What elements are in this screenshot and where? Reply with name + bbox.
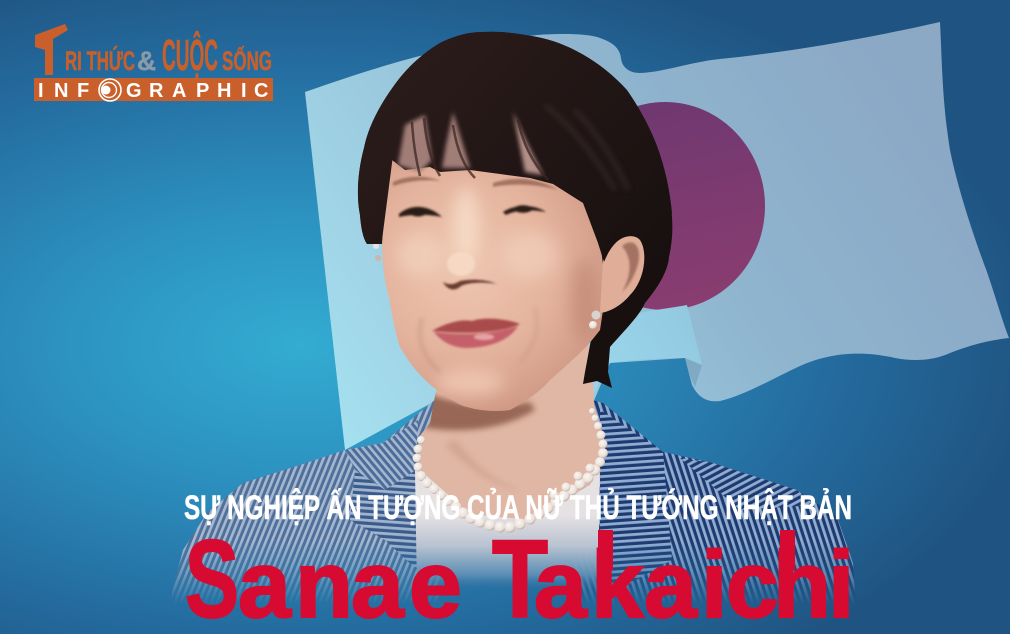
eyebrows: [393, 177, 558, 190]
logo wordmark: CUỘC: [162, 29, 218, 80]
logo infographic text: INFOGRAPHIC: [38, 80, 268, 102]
hair fringe: [358, 32, 672, 262]
collarbone shade: [445, 440, 520, 490]
logo wordmark: [65, 29, 272, 80]
right earring: [589, 310, 600, 329]
lips: [432, 319, 520, 348]
flag fold strip: [560, 305, 702, 400]
nose: [443, 252, 497, 289]
logo: Tri Thức & Cuộc Sống Infographic: [34, 24, 273, 102]
eyes: [399, 205, 546, 217]
jacket: [170, 398, 856, 610]
hair highlights: [545, 105, 628, 190]
jacket right lapel: [600, 410, 672, 600]
k and h ascender stems: [598, 530, 795, 570]
flag red sun: [565, 102, 765, 310]
logo wordmark: &: [137, 46, 156, 76]
neck shadow: [425, 392, 535, 430]
neck and chest: [418, 345, 606, 520]
white shirt: [415, 470, 600, 592]
Japanese flag: [305, 22, 1009, 450]
logo lens icon: [99, 79, 121, 101]
left earring: [373, 243, 381, 261]
logo wordmark: RI THỨC: [65, 45, 135, 76]
fringe strands: [412, 118, 548, 180]
jacket right shoulder: [680, 458, 815, 510]
flag fold shadow: [685, 358, 702, 387]
jacket right side: [570, 398, 856, 610]
jacket left side: [170, 398, 440, 610]
main title: name: [185, 518, 854, 634]
jacket left shoulder chevron: [345, 420, 418, 490]
hair back lobe: [358, 32, 672, 388]
pearl necklace: [412, 408, 608, 532]
fringe light streaks: [398, 112, 543, 175]
logo wordmark: SỐNG: [222, 44, 272, 76]
jacket left lapel: [350, 470, 417, 570]
ear: [600, 236, 644, 313]
ear detail: [622, 242, 639, 292]
flag cloth: [305, 22, 1009, 450]
face: [382, 110, 606, 411]
logo T icon: [35, 24, 68, 75]
logo banner: [34, 78, 273, 101]
face shading: [396, 187, 599, 395]
portrait of Sanae Takaichi: [170, 32, 856, 610]
